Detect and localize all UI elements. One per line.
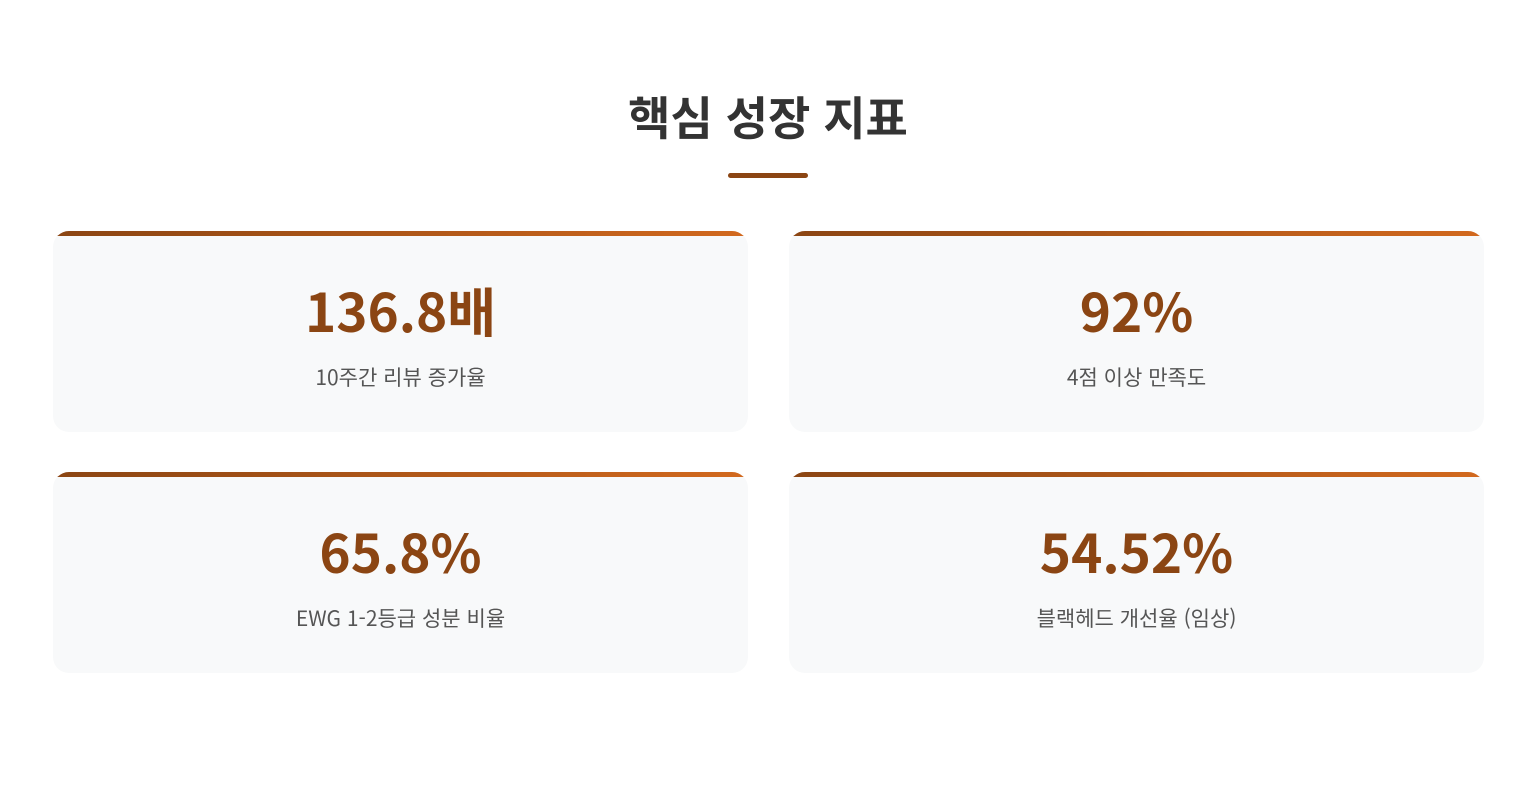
- card: review growth: [53, 231, 748, 432]
- number: 54.52%: [1040, 513, 1233, 589]
- title underline: [728, 173, 808, 178]
- label: 블랙헤드 개선율 (임상): [1037, 603, 1236, 633]
- card: blackhead improvement: [789, 472, 1484, 673]
- title: 핵심 성장 지표: [628, 83, 908, 149]
- number: 136.8배: [305, 272, 496, 348]
- number: 65.8%: [319, 513, 482, 589]
- label: 4점 이상 만족도: [1067, 362, 1206, 392]
- number: 92%: [1080, 272, 1193, 348]
- label: 10주간 리뷰 증가율: [315, 362, 486, 392]
- card: EWG ratio: [53, 472, 748, 673]
- label: EWG 1-2등급 성분 비율: [296, 603, 505, 633]
- card: satisfaction: [789, 231, 1484, 432]
